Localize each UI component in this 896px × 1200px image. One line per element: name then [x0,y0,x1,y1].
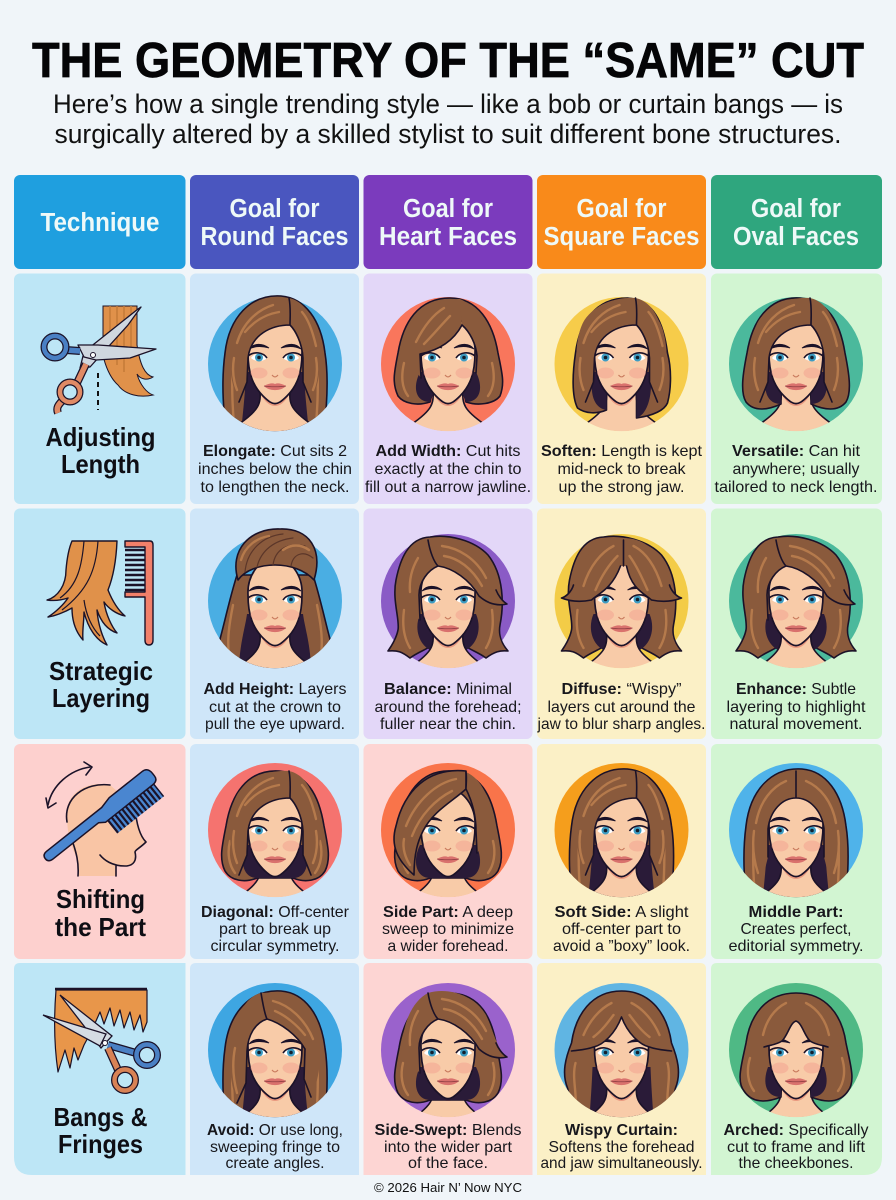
icon: scissors cutting fringe [43,989,158,1090]
caption: Elongate: Cut sits 2 [203,443,347,460]
cell: round / part [190,744,359,959]
technique label: Length [61,449,140,479]
portrait: middle part [729,763,863,898]
portrait: mid-neck bob [554,297,688,432]
caption: editorial symmetry. [728,938,864,955]
caption [198,443,352,496]
technique label [55,884,146,942]
caption: circular symmetry. [210,938,340,955]
cell: square / part [537,744,706,959]
caption: off-center part to [562,921,681,938]
header: Heart Faces [364,175,532,269]
technique label: Bangs & [54,1102,148,1132]
portrait: diagonal part bob [208,763,342,898]
caption: sweep to minimize [382,921,514,938]
cell: heart / bangs [364,963,532,1175]
caption: cut to frame and lift [727,1139,866,1156]
cell: oval / layering [711,508,882,739]
portrait: versatile bob [729,297,863,432]
header: Round Faces: Round Faces [200,223,348,251]
caption: jaw to blur sharp angles. [537,716,706,733]
subtitle [53,89,843,149]
caption: up the strong jaw. [558,479,684,496]
cell: square / bangs [537,963,706,1175]
cell: round / length [190,274,359,504]
portrait: arched fringe bob [729,983,863,1118]
header: Technique: Technique [40,209,160,237]
caption: tailored to neck length. [714,479,878,496]
caption: Side-Swept: Blends [374,1122,522,1139]
caption: Add Height: Layers [204,681,346,698]
caption [374,1122,522,1172]
caption [714,443,878,496]
caption [537,681,706,733]
caption: a wider forehead. [388,938,508,955]
caption: and jaw simultaneously. [540,1155,702,1172]
header: Oval Faces: Goal for [751,195,841,223]
icon: layered hair and comb [47,541,153,645]
technique label: Layering [52,683,150,713]
caption [374,681,522,733]
subtitle: surgically altered by a skilled stylist to suit different bone structures. [54,119,842,149]
caption: pull the eye upward. [205,716,345,733]
technique label: Adjusting [46,422,156,452]
icon: scissors cutting hair [44,306,156,413]
caption: Balance: Minimal [384,681,512,698]
portrait: layered side sweep [381,534,515,668]
portrait: crown height updo [208,528,342,668]
portrait: subtle layers [729,534,863,668]
caption [365,443,531,496]
technique label [49,656,153,713]
caption [541,443,703,496]
caption: Side Part: A deep [383,904,513,921]
caption: Avoid: Or use long, [207,1122,343,1139]
caption: to lengthen the neck. [200,479,350,496]
caption [726,681,866,733]
caption: fuller near the chin. [380,716,516,733]
caption: layering to highlight [726,699,866,716]
portrait: wispy curtain bangs [554,983,688,1118]
technique label: Strategic [49,656,153,686]
caption: Soft Side: A slight [554,904,689,921]
technique label: Shifting [56,884,145,914]
caption: Enhance: Subtle [736,681,856,698]
portrait: side-swept fringe [381,983,515,1118]
header: Oval Faces: Oval Faces [733,223,859,251]
caption: anywhere; usually [732,461,860,478]
caption: mid-neck to break [558,461,686,478]
cell: oval / length [711,274,882,504]
caption: layers cut around the [548,699,696,716]
portrait: long sweeping fringe [208,983,342,1118]
caption [728,904,864,955]
caption: part to break up [219,921,331,938]
caption: into the wider part [384,1139,513,1156]
header: Square Faces [537,175,706,269]
cell: oval / bangs [711,963,882,1175]
header: Round Faces [190,175,359,269]
technique label: the Part [55,912,146,942]
portrait: long side-part [208,295,342,432]
technique panel: Bangs & Fringes [14,963,186,1175]
caption [201,904,350,955]
icon: head profile with comb and arrows [40,762,168,878]
cell: heart / part [364,744,532,959]
caption: cut at the crown to [209,699,341,716]
caption: Add Width: Cut hits [376,443,520,460]
cell: heart / layering [364,508,532,739]
caption: fill out a narrow jawline. [365,479,531,496]
caption: Middle Part: [748,904,844,921]
portrait: soft side long [554,763,688,898]
header: Heart Faces: Goal for [403,195,493,223]
header: Oval Faces [711,175,882,269]
cell: heart / length [364,274,532,504]
caption [382,904,514,955]
caption: the cheekbones. [738,1155,854,1172]
caption: of the face. [408,1155,488,1172]
caption: inches below the chin [198,461,352,478]
header: Technique [14,175,186,269]
header: Round Faces: Goal for [230,195,320,223]
cell: square / length [537,274,706,504]
technique label [46,422,156,479]
caption: Diffuse: “Wispy” [562,681,682,698]
caption [553,904,690,955]
caption [204,681,346,733]
technique label [54,1102,148,1159]
technique panel: Shifting the Part [14,744,186,959]
header: Square Faces: Square Faces [544,223,700,251]
portrait: deep side part [381,763,515,898]
subtitle: Here’s how a single trending style — like a bob or curtain bangs — is [53,89,843,119]
caption: Soften: Length is kept [541,443,703,460]
cell: square / layering [537,508,706,739]
portrait: wispy layers [554,534,688,668]
caption [207,1122,343,1172]
caption: Wispy Curtain: [565,1122,678,1139]
caption: avoid a ”boxy” look. [553,938,690,955]
caption: natural movement. [730,716,862,733]
technique panel: Strategic Layering [14,508,186,739]
cell: round / layering [190,508,359,739]
caption [540,1122,702,1172]
header: Square Faces: Goal for [576,195,667,223]
caption: Diagonal: Off-center [201,904,350,921]
caption: create angles. [226,1155,324,1172]
caption: around the forehead; [374,699,522,716]
footer credit: © 2026 Hair N’ Now NYC [374,1180,522,1195]
technique label: Fringes [58,1129,143,1159]
caption: Creates perfect, [740,921,852,938]
caption: Versatile: Can hit [732,443,861,460]
caption: exactly at the chin to [374,461,522,478]
header: Heart Faces: Heart Faces [379,223,517,251]
cell: oval / part [711,744,882,959]
caption: Arched: Specifically [724,1122,868,1139]
caption: sweeping fringe to [210,1139,340,1156]
technique panel: Adjusting Length [14,274,186,504]
cell: round / bangs [190,963,359,1175]
caption: Softens the forehead [548,1139,694,1156]
portrait: chin bob with fringe [381,297,515,432]
caption [724,1122,868,1172]
